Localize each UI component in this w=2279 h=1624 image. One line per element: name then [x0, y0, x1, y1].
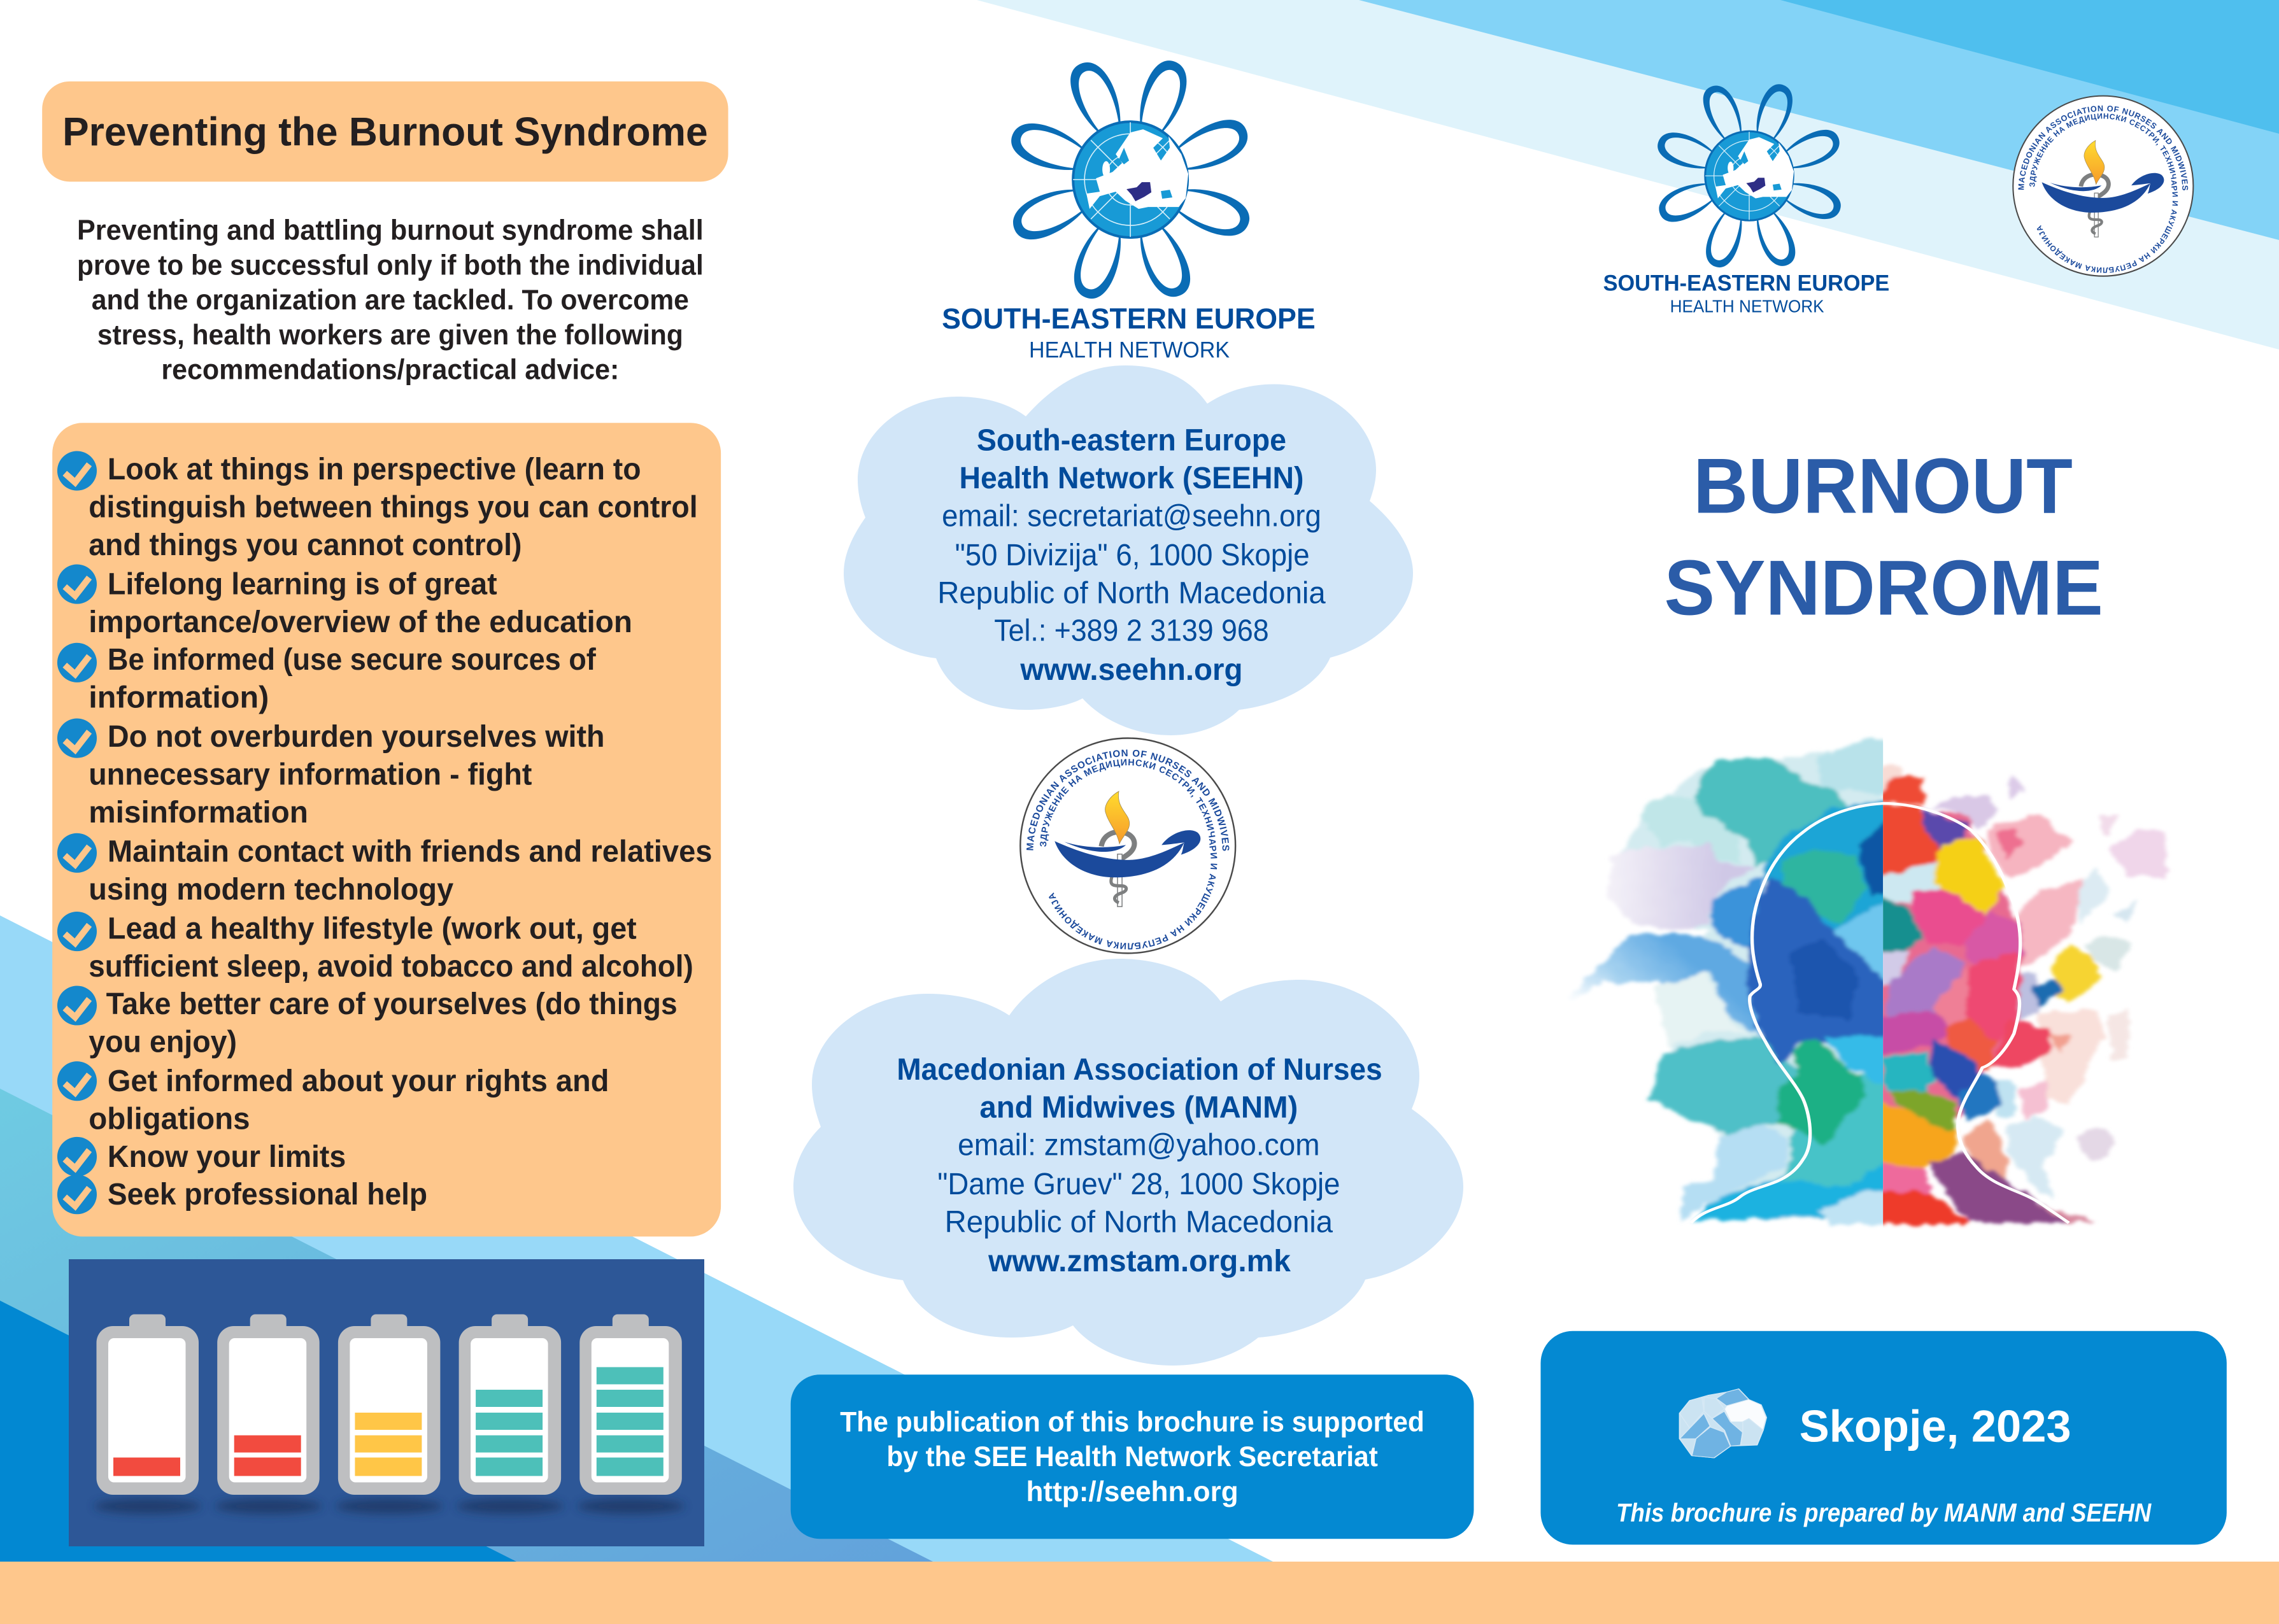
left blue half — [1558, 737, 1900, 1225]
battery 3 — [336, 1314, 443, 1514]
prepared by note: This brochure is prepared by MANM and SEEHN — [1616, 1498, 2152, 1527]
SEEHN contact text: www.seehn.org — [1019, 653, 1243, 687]
recommendations list text: Get informed about your rights and — [108, 1064, 609, 1098]
SEEHN contact text — [937, 424, 1326, 687]
MANM contact text: and Midwives (MANM) — [979, 1091, 1298, 1124]
small logo wordmark: SOUTH-EASTERN EUROPE — [1603, 271, 1889, 296]
cloud: MANM contact shape — [793, 959, 1463, 1366]
title pill: Preventing the Burnout Syndrome — [42, 81, 728, 181]
intro paragraph: prove to be successful only if both the individual — [77, 250, 704, 281]
recommendations list text: you enjoy) — [89, 1026, 237, 1059]
logo wordmark: HEALTH NETWORK — [1029, 338, 1230, 363]
battery 5 — [578, 1314, 685, 1514]
intro paragraph — [77, 215, 704, 386]
MANM contact text: email: zmstam@yahoo.com — [958, 1129, 1320, 1162]
SEEHN contact text: email: secretariat@seehn.org — [942, 499, 1321, 533]
SEEHN contact text: Tel.: +389 2 3139 968 — [994, 614, 1269, 648]
footer card: Skopje 2023 — [1540, 1331, 2227, 1544]
logo: MANM large: MACEDONIAN ASSOCIATION OF NURSES AND MIDWIVES — [1026, 749, 1229, 851]
recommendations list text: unnecessary information - fight — [89, 758, 532, 792]
support card: http://seehn.org — [1026, 1476, 1239, 1507]
MANM contact text: Republic of North Macedonia — [945, 1206, 1333, 1239]
recommendations list text: Take better care of yourselves (do things — [106, 987, 678, 1021]
flower emblem small — [1653, 80, 1845, 272]
recommendations list text — [89, 453, 712, 1211]
recommendations list text: sufficient sleep, avoid tobacco and alcohol) — [89, 950, 693, 984]
recommendations panel — [52, 423, 721, 1236]
recommendations list text: Look at things in perspective (learn to — [108, 453, 641, 486]
icon: map of North Macedonia — [1680, 1389, 1766, 1458]
SEEHN contact text: South-eastern Europe — [977, 424, 1286, 458]
recommendations list text: Lifelong learning is of great — [108, 568, 497, 602]
support card — [791, 1374, 1473, 1539]
MANM contact text: "Dame Gruev" 28, 1000 Skopje — [937, 1168, 1340, 1201]
intro paragraph: recommendations/practical advice: — [161, 355, 619, 386]
SEEHN contact text: Republic of North Macedonia — [937, 576, 1326, 610]
logo wordmark — [942, 302, 1316, 363]
logo: SEEHN large — [942, 55, 1316, 363]
city and year: Skopje, 2023 — [1800, 1401, 2071, 1451]
intro paragraph: Preventing and battling burnout syndrome shall — [77, 215, 704, 246]
intro paragraph: stress, health workers are given the following — [97, 320, 683, 351]
flower emblem — [1005, 55, 1255, 304]
white head outline — [1691, 803, 2069, 1223]
check icons — [57, 451, 97, 1214]
recommendations list text: Seek professional help — [108, 1178, 427, 1211]
intro paragraph: and the organization are tackled. To overcome — [92, 285, 689, 316]
logo: MANM large: ЗДРУЖЕНИЕ НА МЕДИЦИНСКИ СЕСТРИ, ТЕХНИЧАРИ И АКУШЕРКИ НА РЕПУБЛИКА МАКЕДОНИЈА — [1040, 759, 1218, 950]
recommendations list text: misinformation — [89, 796, 308, 830]
main title: BURNOUT — [1693, 442, 2073, 530]
recommendations list text: Lead a healthy lifestyle (work out, get — [108, 912, 637, 946]
watercolor head illustration — [1558, 737, 2166, 1225]
small logo wordmark — [1603, 271, 1889, 316]
right multicolour half — [1875, 764, 2166, 1225]
recommendations list text: obligations — [89, 1103, 250, 1136]
battery 2 — [215, 1314, 322, 1514]
recommendations list text: Know your limits — [108, 1140, 346, 1174]
support card: The publication of this brochure is supported — [840, 1406, 1424, 1437]
logo: SEEHN small — [1603, 80, 1889, 316]
main title — [1664, 442, 2103, 632]
main title: SYNDROME — [1664, 544, 2103, 632]
battery 1 — [94, 1314, 201, 1514]
recommendations list text: information) — [89, 681, 269, 715]
battery panel — [69, 1259, 704, 1546]
MANM contact text — [897, 1053, 1382, 1278]
title pill: Preventing the Burnout Syndrome: Preventing the Burnout Syndrome — [62, 109, 708, 154]
recommendations list text: using modern technology — [89, 873, 453, 907]
MANM contact text: www.zmstam.org.mk — [988, 1245, 1291, 1278]
logo: MANM small: ЗДРУЖЕНИЕ НА МЕДИЦИНСКИ СЕСТРИ, ТЕХНИЧАРИ И АКУШЕРКИ НА РЕПУБЛИКА МАКЕДОНИЈА — [2029, 113, 2178, 273]
recommendations list text: and things you cannot control) — [89, 528, 522, 562]
logo wordmark: SOUTH-EASTERN EUROPE — [942, 302, 1316, 335]
logo: MANM small: MACEDONIAN ASSOCIATION OF NURSES AND MIDWIVES — [2019, 106, 2188, 190]
cloud: SEEHN contact shape — [844, 365, 1413, 735]
recommendations list text: Maintain contact with friends and relatives — [108, 835, 712, 869]
small logo wordmark: HEALTH NETWORK — [1670, 297, 1824, 316]
support card: by the SEE Health Network Secretariat — [886, 1441, 1378, 1472]
recommendations list text: importance/overview of the education — [89, 605, 632, 639]
SEEHN contact text: Health Network (SEEHN) — [959, 462, 1303, 495]
recommendations list text: distinguish between things you can control — [89, 491, 698, 525]
battery 4 — [457, 1314, 564, 1514]
MANM contact text: Macedonian Association of Nurses — [897, 1053, 1382, 1087]
SEEHN contact text: "50 Divizija" 6, 1000 Skopje — [955, 539, 1310, 572]
recommendations list text: Be informed (use secure sources of — [108, 643, 597, 677]
recommendations list text: Do not overburden yourselves with — [108, 720, 605, 754]
